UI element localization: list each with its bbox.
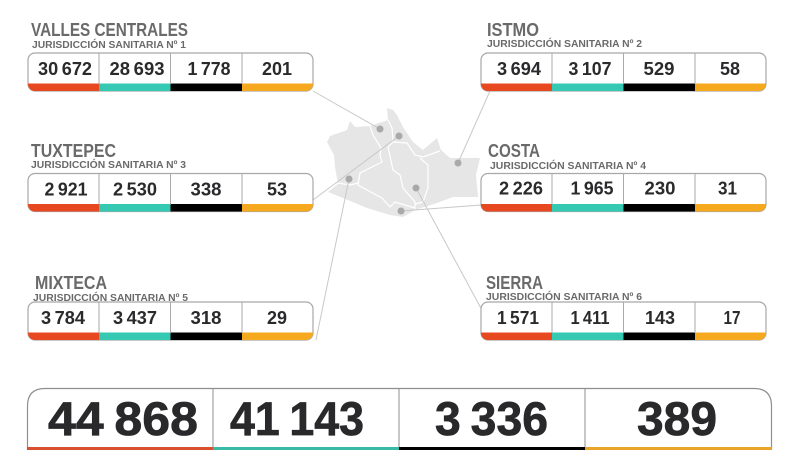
heading: Istmo: ISTMO	[487, 20, 539, 40]
stat card: Valles Centrales: 1 778	[188, 58, 230, 79]
stat card: Mixteca: 318	[190, 307, 222, 328]
stat card: Costa: 2 226	[499, 178, 543, 198]
stat card: Costa: 230	[644, 178, 676, 198]
totals card frame	[28, 388, 772, 450]
panel: Sierra	[481, 273, 766, 340]
panel: Mixteca	[28, 273, 313, 340]
stat card: Istmo: 3 107	[568, 58, 612, 79]
total: 389: 389	[637, 392, 717, 445]
stat card: Tuxtepec: 2 921	[44, 178, 88, 200]
stat card: Istmo: 3 694	[497, 58, 542, 79]
total: 41 143: 41 143	[230, 392, 364, 445]
heading: Sierra: SIERRA	[486, 273, 543, 293]
stat card: Mixteca: 29	[267, 307, 287, 328]
stat card: Valles Centrales	[28, 53, 313, 92]
stat card: Costa	[481, 174, 766, 212]
panel: Costa	[481, 141, 766, 212]
stat card: Tuxtepec: 338	[190, 178, 222, 200]
subheading: jurisdiction 1: JURISDICCIÓN SANITARIA Nº 1	[32, 38, 186, 51]
stat card: Tuxtepec: 2 530	[113, 178, 157, 200]
stat card: Mixteca: 3 437	[113, 307, 157, 328]
stat card: Sierra: 17	[724, 307, 740, 328]
stat card: Tuxtepec	[28, 174, 313, 212]
map location dots	[346, 126, 462, 214]
map of Oaxaca with jurisdictions	[327, 108, 480, 217]
stat card: Costa: 1 965	[570, 178, 614, 198]
panel: Tuxtepec	[28, 141, 313, 212]
stat card: Valles Centrales: 30 672	[38, 58, 92, 79]
stat card: Sierra: 1 571	[497, 307, 539, 328]
subheading: jurisdiction 5: JURISDICCIÓN SANITARIA Nº 5	[33, 291, 188, 304]
subheading: jurisdiction 3: JURISDICCIÓN SANITARIA Nº 3	[31, 158, 186, 171]
stat card: Costa: 31	[718, 178, 737, 198]
stat card: Mixteca: 3 784	[41, 307, 86, 328]
panel: Valles Centrales	[28, 20, 313, 92]
stat card: Istmo	[481, 53, 766, 92]
panel: state totals	[27, 388, 772, 450]
heading: Tuxtepec: TUXTEPEC	[31, 141, 116, 161]
subheading: jurisdiction 6: JURISDICCIÓN SANITARIA Nº 6	[486, 290, 642, 303]
stat card: Sierra	[481, 302, 766, 340]
total: 44 868: 44 868	[48, 392, 198, 445]
heading: Valles Centrales: VALLES CENTRALES	[31, 20, 188, 40]
leader lines from cards to map	[313, 91, 490, 340]
stat card: Sierra: 1 411	[570, 307, 610, 328]
subheading: jurisdiction 4: JURISDICCIÓN SANITARIA Nº 4	[490, 159, 646, 172]
subheading: jurisdiction 2: JURISDICCIÓN SANITARIA Nº 2	[487, 37, 642, 50]
stat card: Tuxtepec: 53	[267, 178, 287, 200]
stat card: Istmo: 58	[720, 58, 740, 79]
stat card: Valles Centrales: 28 693	[110, 58, 164, 79]
heading: Mixteca: MIXTECA	[35, 273, 107, 293]
stat card: Mixteca	[28, 302, 313, 340]
total: 3 336: 3 336	[435, 392, 548, 445]
stat card: Sierra: 143	[645, 307, 675, 328]
heading: Costa: COSTA	[488, 141, 540, 161]
stat card: Valles Centrales: 201	[262, 58, 292, 79]
totals colour bar	[27, 447, 772, 450]
stat card: Istmo: 529	[644, 58, 674, 79]
panel: Istmo	[481, 20, 766, 92]
